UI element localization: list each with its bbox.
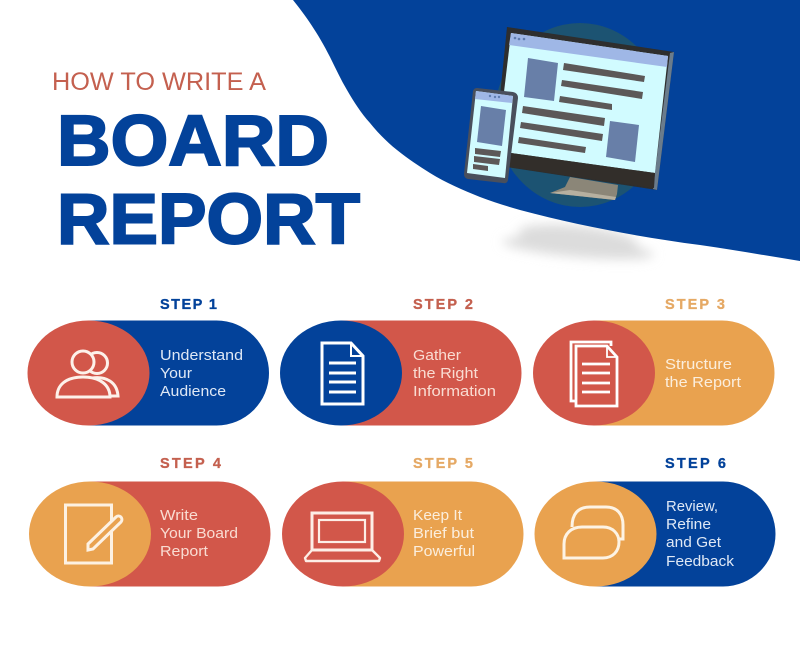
step 2 <box>280 297 522 426</box>
step 5 icon circle <box>282 482 404 586</box>
title: board report: REPORT <box>57 180 360 260</box>
step 6 text: Refine <box>666 517 711 533</box>
step 1 pill <box>88 320 269 426</box>
monitor <box>493 27 674 190</box>
step 5 <box>282 456 524 586</box>
step 2 text: Information <box>413 384 496 400</box>
step 1 <box>28 297 269 426</box>
step 1 text: Your <box>160 366 192 382</box>
icon: document <box>322 343 363 404</box>
icon: note and pen <box>66 505 122 563</box>
title: board report <box>57 102 360 260</box>
step 4 <box>29 456 270 586</box>
step 1 text <box>160 348 243 400</box>
step 4 text <box>160 508 238 560</box>
step 1 label: STEP 1 <box>160 297 217 313</box>
step 6 icon circle <box>534 482 656 586</box>
step 2 text: Gather <box>413 348 461 364</box>
step 1 text: Understand <box>160 348 243 364</box>
backdrop globe <box>495 23 665 207</box>
step 3 text: the Report <box>665 375 741 391</box>
step 6 <box>534 456 776 586</box>
step 3 label: STEP 3 <box>665 297 725 313</box>
blue curved background shape <box>293 0 800 261</box>
step 5 text <box>413 508 475 560</box>
step 2 pill <box>341 320 522 426</box>
step 2 text <box>413 348 496 400</box>
step 2 icon circle <box>280 320 402 426</box>
step 3 pill <box>594 320 774 426</box>
icon: speech bubbles <box>564 507 623 558</box>
step 3 text: Structure <box>665 357 732 373</box>
step 1 icon circle <box>28 320 150 426</box>
heading: how to write a: HOW TO WRITE A <box>52 68 266 96</box>
step 6 text <box>666 499 735 570</box>
step 5 pill <box>343 482 524 586</box>
step 4 pill <box>90 482 270 586</box>
device shadow <box>502 220 654 264</box>
step 4 text: Report <box>160 544 208 560</box>
step 3 <box>533 297 774 426</box>
step 1 text: Audience <box>160 384 226 400</box>
title: board report: BOARD <box>57 102 329 181</box>
step 4 text: Write <box>160 508 198 524</box>
step 6 label: STEP 6 <box>665 456 726 472</box>
step 5 text: Keep It <box>413 508 462 524</box>
icon: documents <box>571 342 617 406</box>
step 6 text: and Get <box>666 535 721 551</box>
monitor content <box>524 58 558 101</box>
icon: people <box>57 351 118 397</box>
step 2 label: STEP 2 <box>413 297 473 313</box>
step 5 label: STEP 5 <box>413 456 473 472</box>
phone <box>464 88 518 183</box>
step 6 text: Review, <box>666 499 718 515</box>
step 3 icon circle <box>533 320 655 426</box>
step 6 pill <box>596 482 776 586</box>
step 5 text: Powerful <box>413 544 475 560</box>
step 5 text: Brief but <box>413 526 474 542</box>
illustration: devices <box>464 23 674 207</box>
step 3 text <box>665 357 741 391</box>
icon: laptop <box>305 513 380 561</box>
step 4 text: Your Board <box>160 526 238 542</box>
step 2 text: the Right <box>413 366 478 382</box>
monitor stand <box>550 177 618 200</box>
step 6 text: Feedback <box>666 554 735 570</box>
step 4 label: STEP 4 <box>160 456 221 472</box>
step 4 icon circle <box>29 482 151 586</box>
